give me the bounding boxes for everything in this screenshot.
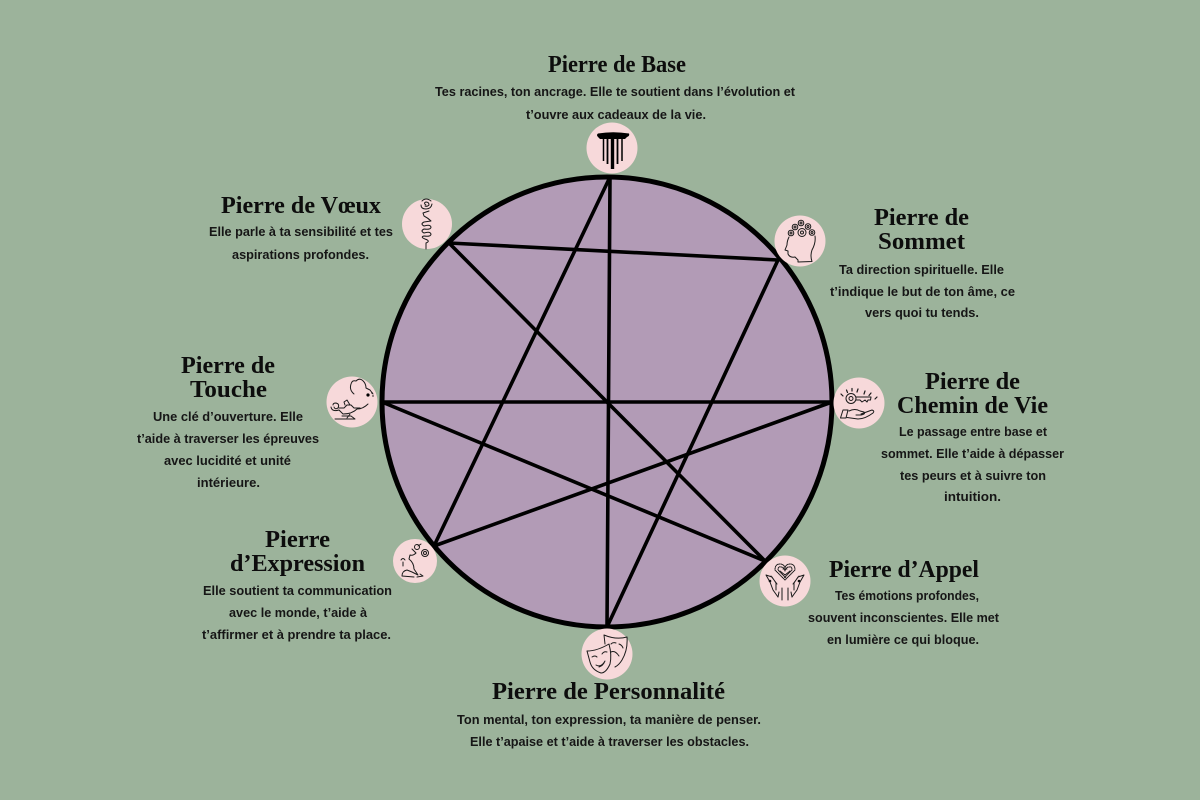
icon: figure with flowers [393,539,437,583]
text block: Pierre de Chemin de Vie: Le passage entre base et [899,425,1048,439]
text block: Pierre d'Expression: d’Expression [230,551,365,577]
text block: Pierre de Chemin de Vie: Chemin de Vie [897,393,1048,419]
text block: Pierre d'Expression: avec le monde, t’aide à [229,606,367,620]
icon: theatre masks [582,628,632,680]
text block: Pierre de Touche: Pierre de [181,353,275,379]
text block: Pierre d'Expression: t’affirmer et à prendre ta place. [202,628,391,642]
icon: head with spirals [774,216,826,266]
text block: Pierre d'Appel [808,557,1000,647]
text block: Pierre d'Expression: Pierre [265,527,330,553]
text block: Pierre de Chemin de Vie: sommet. Elle t’aide à dépasser [881,447,1064,461]
text block: Pierre de Base: t’ouvre aux cadeaux de la vie. [526,108,706,122]
text block: Pierre de Touche [137,353,319,490]
text block: Pierre de Base: Pierre de Base [548,52,686,78]
text block: Pierre de Personnalité: Elle t’apaise et t’aide à traverser les obstacles. [470,735,749,749]
text block: Pierre d'Appel: souvent inconscientes. Elle met [808,611,1000,625]
text block: Pierre de Touche: avec lucidité et unité [164,454,291,468]
star wheel diagram [382,177,832,627]
text block: Pierre de Touche: t’aide à traverser les épreuves [137,432,319,446]
text block: Pierre de Sommet: Sommet [878,229,965,255]
icon: key in hand [834,378,884,428]
icon: hands with flowers [760,556,810,606]
text block: Pierre de Chemin de Vie: tes peurs et à suivre ton [900,469,1046,483]
text block: Pierre de Vœux: Elle parle à ta sensibilité et tes [209,225,393,239]
text block: Pierre de Personnalité: Ton mental, ton expression, ta manière de penser. [457,713,761,727]
text block: Pierre d'Appel: Pierre d’Appel [829,557,979,583]
text block: Pierre de Touche: Touche [190,377,267,403]
text block: Pierre d'Appel: en lumière ce qui bloque. [827,633,979,647]
text block: Pierre de Sommet [830,205,1015,320]
text block: Pierre de Vœux: aspirations profondes. [232,248,369,262]
text block: Pierre de Personnalité: Pierre de Personnalité [492,679,725,705]
icon: column [586,122,638,174]
text block: Pierre d'Appel: Tes émotions profondes, [835,589,979,603]
text block: Pierre de Chemin de Vie [881,369,1064,504]
text block: Pierre de Touche: Une clé d’ouverture. Elle [153,410,303,424]
text block: Pierre de Vœux: Pierre de Vœux [221,193,381,219]
text block: Pierre de Chemin de Vie: intuition. [944,490,1001,504]
text block: Pierre de Base: Tes racines, ton ancrage. Elle te soutient dans l’évolution et [435,85,796,99]
text block: Pierre de Sommet: t’indique le but de ton âme, ce [830,285,1015,299]
text block: Pierre de Vœux [209,193,393,262]
text block: Pierre de Touche: intérieure. [197,476,260,490]
text block: Pierre de Sommet: Pierre de [874,205,969,231]
text block: Pierre de Sommet: Ta direction spirituelle. Elle [839,263,1004,277]
text block: Pierre d'Expression [202,527,392,642]
icon: genie lamp [326,376,378,428]
icon: spiral sigil [402,199,452,249]
text block: Pierre de Chemin de Vie: Pierre de [925,369,1020,395]
text block: Pierre d'Expression: Elle soutient ta communication [203,584,392,598]
text block: Pierre de Personnalité [457,679,761,749]
text block: Pierre de Base [435,52,796,122]
text block: Pierre de Sommet: vers quoi tu tends. [865,306,979,320]
